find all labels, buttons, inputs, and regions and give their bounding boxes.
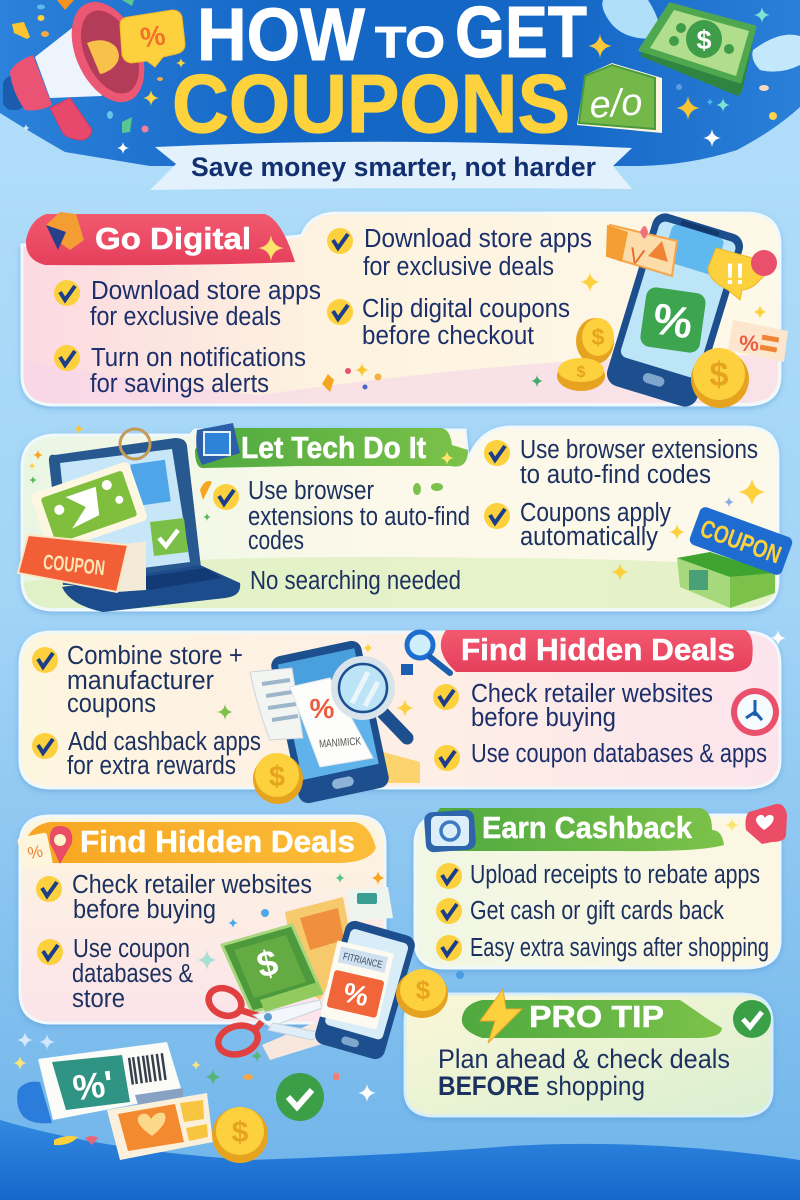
checklist: center: extensions to auto-find [248,503,470,531]
illustration: laptop with coupons [18,424,240,612]
checklist: left: for savings alerts [90,370,269,398]
checklist: left: Download store apps [91,277,321,305]
illustration: bottom coupons [17,1042,268,1163]
illustration: bottom coupons: $ [232,1116,249,1149]
heading: find hidden deals orange: Find Hidden Deals [80,824,355,859]
checklist: left: coupons [67,690,156,718]
heading: pro tip: PRO TIP [529,999,664,1034]
subtitle ribbon [150,142,632,190]
checklist: Check retailer websites [72,871,312,899]
title [172,0,587,150]
checklist: left: Turn on notifications [91,344,306,372]
icon: flying money: $ [696,25,712,55]
text: pro tip [438,1044,730,1101]
checklist: center [213,477,470,595]
illustration: coupon box [413,478,794,608]
illustration: phone with coupons [322,210,788,410]
checklist: Use coupon [73,935,190,963]
checklist: right: before buying [471,704,616,732]
heading: find hidden deals orange [17,822,376,870]
icon: heart tag [745,804,787,844]
title: TO [375,18,445,67]
checklist: right: Check retailer websites [471,680,713,708]
heading: earn cashback [424,808,739,853]
heading: go digital: Go Digital [95,221,251,256]
heading: let tech do it [195,423,468,468]
heading: go digital [26,212,295,265]
illustration: coupon pile with scissors: % [340,977,372,1012]
checklist: before buying [73,896,216,924]
illustration: coupon pile with scissors: $ [416,975,431,1005]
text: pro tip: BEFORE shopping [438,1071,645,1101]
checklist: right: to auto-find codes [520,461,711,489]
checklist: left: Add cashback apps [68,728,261,756]
illustration: bottom coupons: %' [70,1062,116,1109]
icon: clock [731,688,779,736]
illustration: phone with coupons: !! [725,258,745,291]
illustration: phone with coupons: % [650,295,696,348]
checklist: left: for exclusive deals [90,303,281,331]
checklist: right: Coupons apply [520,499,671,527]
checklist: databases & [72,960,193,988]
icon: check badge [733,1000,771,1038]
icon: percent speech bubble: % [138,19,167,54]
checklist [436,861,769,962]
checklist: right: for exclusive deals [363,253,554,281]
icon: green coupon [577,63,662,133]
icon: flying money [602,0,800,96]
illustration: phone with coupons: V [626,242,647,270]
subtitle ribbon: Save money smarter, not harder [191,152,596,182]
panel: combine coupons [20,630,780,805]
illustration: coupon pile with scissors: $ [253,941,282,986]
illustration: phone with coupons: $ [710,356,729,394]
heading: find hidden deals pink [401,630,753,675]
heading: let tech do it: Let Tech Do It [241,430,426,465]
panel: earn cashback [415,804,787,968]
illustration: phone with magnifier: MANIMICK [319,736,362,750]
checklist: store [72,985,125,1013]
illustration: phone with magnifier [217,639,420,805]
illustration: laptop with coupons: COUPON [42,551,106,580]
checklist: center: codes [248,527,304,555]
checklist: right [327,225,592,350]
title: COUPONS [172,57,570,150]
checklist: left: Combine store + [67,642,243,670]
checklist: center: Use browser [248,477,374,505]
checklist: left: manufacturer [67,667,214,695]
checklist: center: No searching needed [250,567,461,595]
illustration: phone with magnifier: % [310,693,335,724]
text: pro tip: Plan ahead & check deals [438,1044,730,1074]
checklist: left: for extra rewards [67,752,236,780]
checklist: right: Download store apps [364,225,592,253]
icon: percent speech bubble [120,10,185,67]
panel: find hidden deals [17,816,385,1023]
illustration: phone with coupons: % [739,331,759,356]
panel: pro tip [405,989,772,1116]
panel: go digital [22,210,788,410]
illustration: coupon pile with scissors [197,871,448,1061]
heading: earn cashback: Earn Cashback [482,810,693,845]
checklist: right: before checkout [362,322,534,350]
checklist: left [54,277,321,398]
illustration: coupon pile with scissors: FITRIANCE [342,951,383,971]
bottom tint [24,557,776,608]
checklist: right [433,680,767,771]
icon: megaphone [3,0,159,140]
checklist [36,871,312,1013]
checklist: right: Clip digital coupons [362,295,570,323]
icon: green coupon: e/o [588,81,644,127]
checklist: left [32,642,261,780]
illustration: phone with magnifier: $ [269,761,285,793]
illustration: phone with coupons: $ [592,324,605,350]
illustration: phone with coupons: $ [577,364,586,381]
checklist: right: automatically [520,523,658,551]
bottom tint [24,355,778,403]
heading: find hidden deals pink: Find Hidden Deals [461,632,735,667]
heading: pro tip [462,989,722,1043]
icon: green check badge [276,1073,324,1121]
checklist: Get cash or gift cards back [470,897,724,925]
checklist: right: Use browser extensions [520,436,758,464]
checklist: right [484,436,758,551]
panel: let tech do it [18,423,794,612]
heading: find hidden deals orange: % [26,842,45,863]
